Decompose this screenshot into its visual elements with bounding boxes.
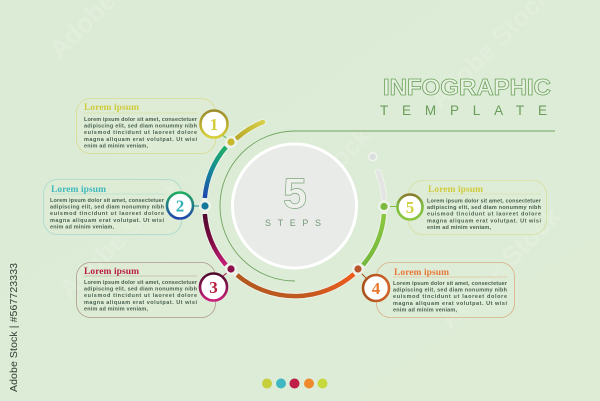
node 1 [225,136,237,148]
ring segments [205,122,384,296]
connector 2 [193,205,201,207]
connector 3 [222,271,229,277]
step 1 text [84,117,198,149]
segment: orange [237,274,354,296]
central circle [232,144,356,268]
node 4 [352,263,364,275]
watermark: Adobe Stock [243,120,377,254]
badge 4 [363,275,389,301]
badge 1 [200,110,228,138]
node 3 [225,263,237,275]
step 1 text: adipiscing elit, sed diam nonummy nibh [84,124,198,130]
step 5 text: Lorem ipsum dolor sit amet, consectetuer [427,198,542,204]
step 1 text: euismod tincidunt ut laoreet dolore [84,130,197,136]
small gray dot [369,153,377,161]
step 1 text: Lorem ipsum dolor sit amet, consectetuer [84,117,198,123]
step 2 text: adipiscing elit, sed diam nonummy nibh [50,205,165,211]
step 4 text: euismod tincidunt ut laoreet dolore [393,294,507,300]
badge 4: 4 [372,279,381,298]
panel: step 1 [76,98,216,154]
step 1 [76,98,237,154]
step 2 text: Lorem ipsum dolor sit amet, consectetuer [50,198,165,204]
step 2 text: enim ad minim veniam, [50,224,114,230]
step 2 text [50,198,165,230]
step 4 text: enim ad minim veniam, [393,307,457,313]
step 2 text: magna aliquam erat volutpat. Ut wisi [50,218,164,224]
segment: green [363,214,384,265]
segment: yellow [237,122,263,138]
step 5 text [427,198,542,231]
watermark [43,0,567,334]
steps label: STEPS [265,218,321,228]
step 3 text: euismod tincidunt ut laoreet dolore [84,293,197,299]
step 5 text: adipiscing elit, sed diam nonummy nibh [427,205,542,211]
stock id label: Adobe Stock | #567723333 [8,263,20,392]
step 3 text: adipiscing elit, sed diam nonummy nibh [84,287,198,293]
step 3 text: enim ad minim veniam, [84,306,148,312]
heading: template: TEMPLATE [380,103,547,118]
panel: step 4 [376,262,514,318]
segment: maroon [205,214,226,265]
step 2 heading: Lorem ipsum [51,185,106,195]
step 1 text: enim ad minim veniam, [84,143,148,149]
node 2 [199,200,211,212]
step 4 [352,262,514,318]
badge 5 [398,194,422,220]
panel: step 3 [76,262,216,318]
connector 5 [388,206,397,208]
step 5 text: enim ad minim veniam, [427,225,491,231]
step 2 text: euismod tincidunt ut laoreet dolore [50,211,164,217]
big number 5: 5 [283,170,307,218]
step 3 text: magna aliquam erat volutpat. Ut wisi [84,300,197,306]
panel: step 5 [408,180,546,234]
badge 2: 2 [176,196,184,216]
step 1 text: magna aliquam erat volutpat. Ut wisi [84,137,197,143]
badge 5: 5 [406,198,414,217]
badge 3 [200,274,227,300]
badge 1: 1 [210,115,218,134]
heading: infographic: INFOGRAPHIC [383,74,551,100]
watermark: Adobe Stock [53,170,187,304]
step 3 [76,262,237,318]
step 4 text: Lorem ipsum dolor sit amet, consectetuer [393,281,508,287]
step 2 [44,180,211,234]
badge 3: 3 [209,278,218,297]
step 4 text: magna aliquam erat volutpat. Ut wisi [393,301,507,307]
badge 2 [167,192,193,218]
step 3 text [84,280,198,312]
connector 1 [221,134,229,140]
title [380,74,551,118]
segment: gray [378,172,384,198]
watermark: Adobe Stock [433,200,567,334]
node 5 [378,200,390,212]
footer dots [262,378,328,388]
step 1 heading: Lorem ipsum [84,103,139,113]
step 4 heading: Lorem ipsum [394,268,449,278]
step 3 heading: Lorem ipsum [84,267,139,277]
step 3 text: Lorem ipsum dolor sit amet, consectetuer [84,280,198,286]
panel: step 2 [44,180,182,234]
step 4 text [393,281,508,313]
step 5 text: euismod tincidunt ut laoreet dolore [427,212,541,218]
connector 4 [360,272,367,279]
step 4 text: adipiscing elit, sed diam nonummy nibh [393,288,508,294]
inner thin arc and title rule [220,131,555,281]
step 5 heading: Lorem ipsum [428,185,483,195]
step 5 [378,180,546,234]
step 5 text: magna aliquam erat volutpat. Ut wisi [427,218,541,224]
segment: green blue [205,147,226,198]
